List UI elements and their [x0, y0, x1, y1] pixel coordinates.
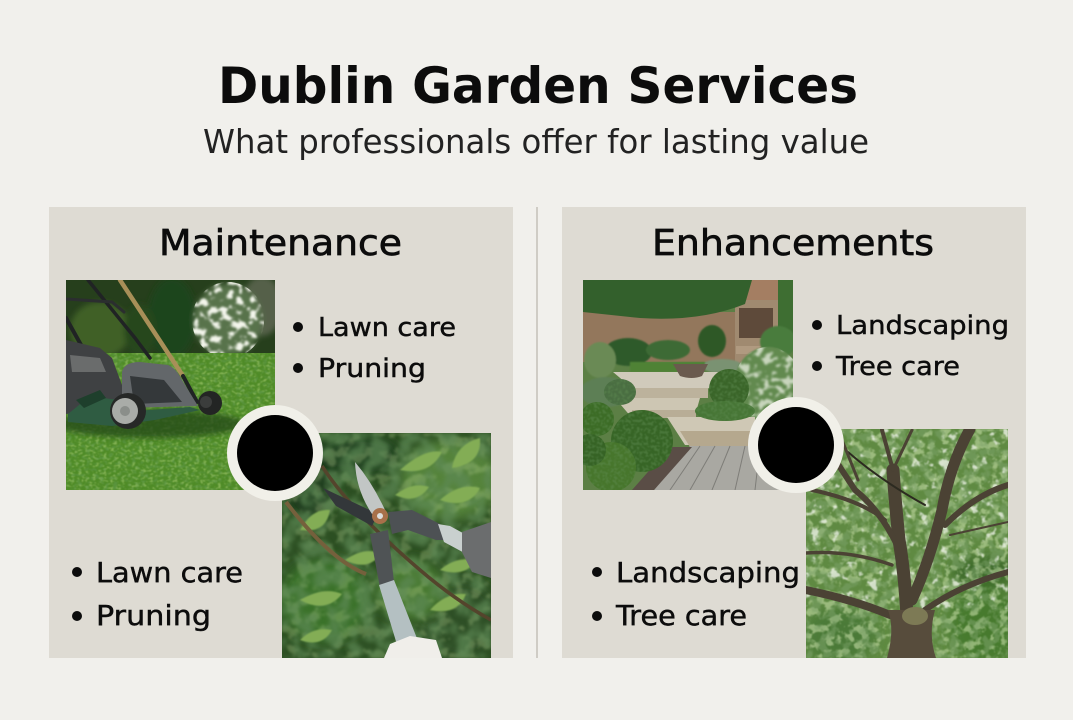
- panel: maintenance: [49, 207, 513, 660]
- bullets: bottom left of enhancements: Landscaping: [616, 557, 800, 589]
- terrace and steps: [613, 372, 755, 447]
- heading: maintenance: Maintenance: [159, 223, 402, 264]
- bullets: top right of enhancements: Landscaping: [836, 311, 1009, 341]
- bullets: top right of enhancements: Tree care: [835, 352, 960, 382]
- bullets: top right of maintenance: [293, 313, 456, 384]
- mower shadow: [55, 410, 245, 438]
- mower handle: [66, 280, 197, 402]
- photo: oak tree: [804, 429, 1021, 663]
- bullets: bottom left of maintenance: [72, 557, 243, 632]
- photo: landscaped garden: [574, 280, 802, 492]
- bullets: bottom left of maintenance: Lawn care: [96, 557, 243, 589]
- bullets: top right of maintenance: Pruning: [318, 354, 426, 384]
- bullets: bottom left of enhancements: Tree care: [615, 600, 747, 632]
- heading: enhancements: Enhancements: [652, 223, 934, 264]
- shears: [323, 462, 491, 658]
- hedge: [583, 280, 752, 319]
- pergola: [735, 300, 778, 364]
- photo: pruning shears: [280, 433, 500, 660]
- subtitle: What professionals offer for lasting value: [203, 122, 869, 161]
- bullets: top right of maintenance: Lawn care: [318, 313, 456, 343]
- bullets: bottom left of maintenance: Pruning: [96, 600, 211, 632]
- title: Dublin Garden Services: [218, 57, 858, 115]
- bullets: top right of enhancements: [812, 311, 1009, 382]
- badge: maintenance circle: [227, 405, 323, 501]
- mower body: [66, 340, 222, 429]
- divider: [536, 207, 538, 658]
- panel: enhancements: [562, 207, 1026, 663]
- tree trunk and branches: [806, 429, 1008, 640]
- badge: enhancements circle: [748, 397, 844, 493]
- planter bowl: [673, 364, 708, 378]
- photo: lawn mower: [55, 276, 282, 490]
- bullets: bottom left of enhancements: [592, 557, 800, 632]
- fence: [583, 312, 743, 362]
